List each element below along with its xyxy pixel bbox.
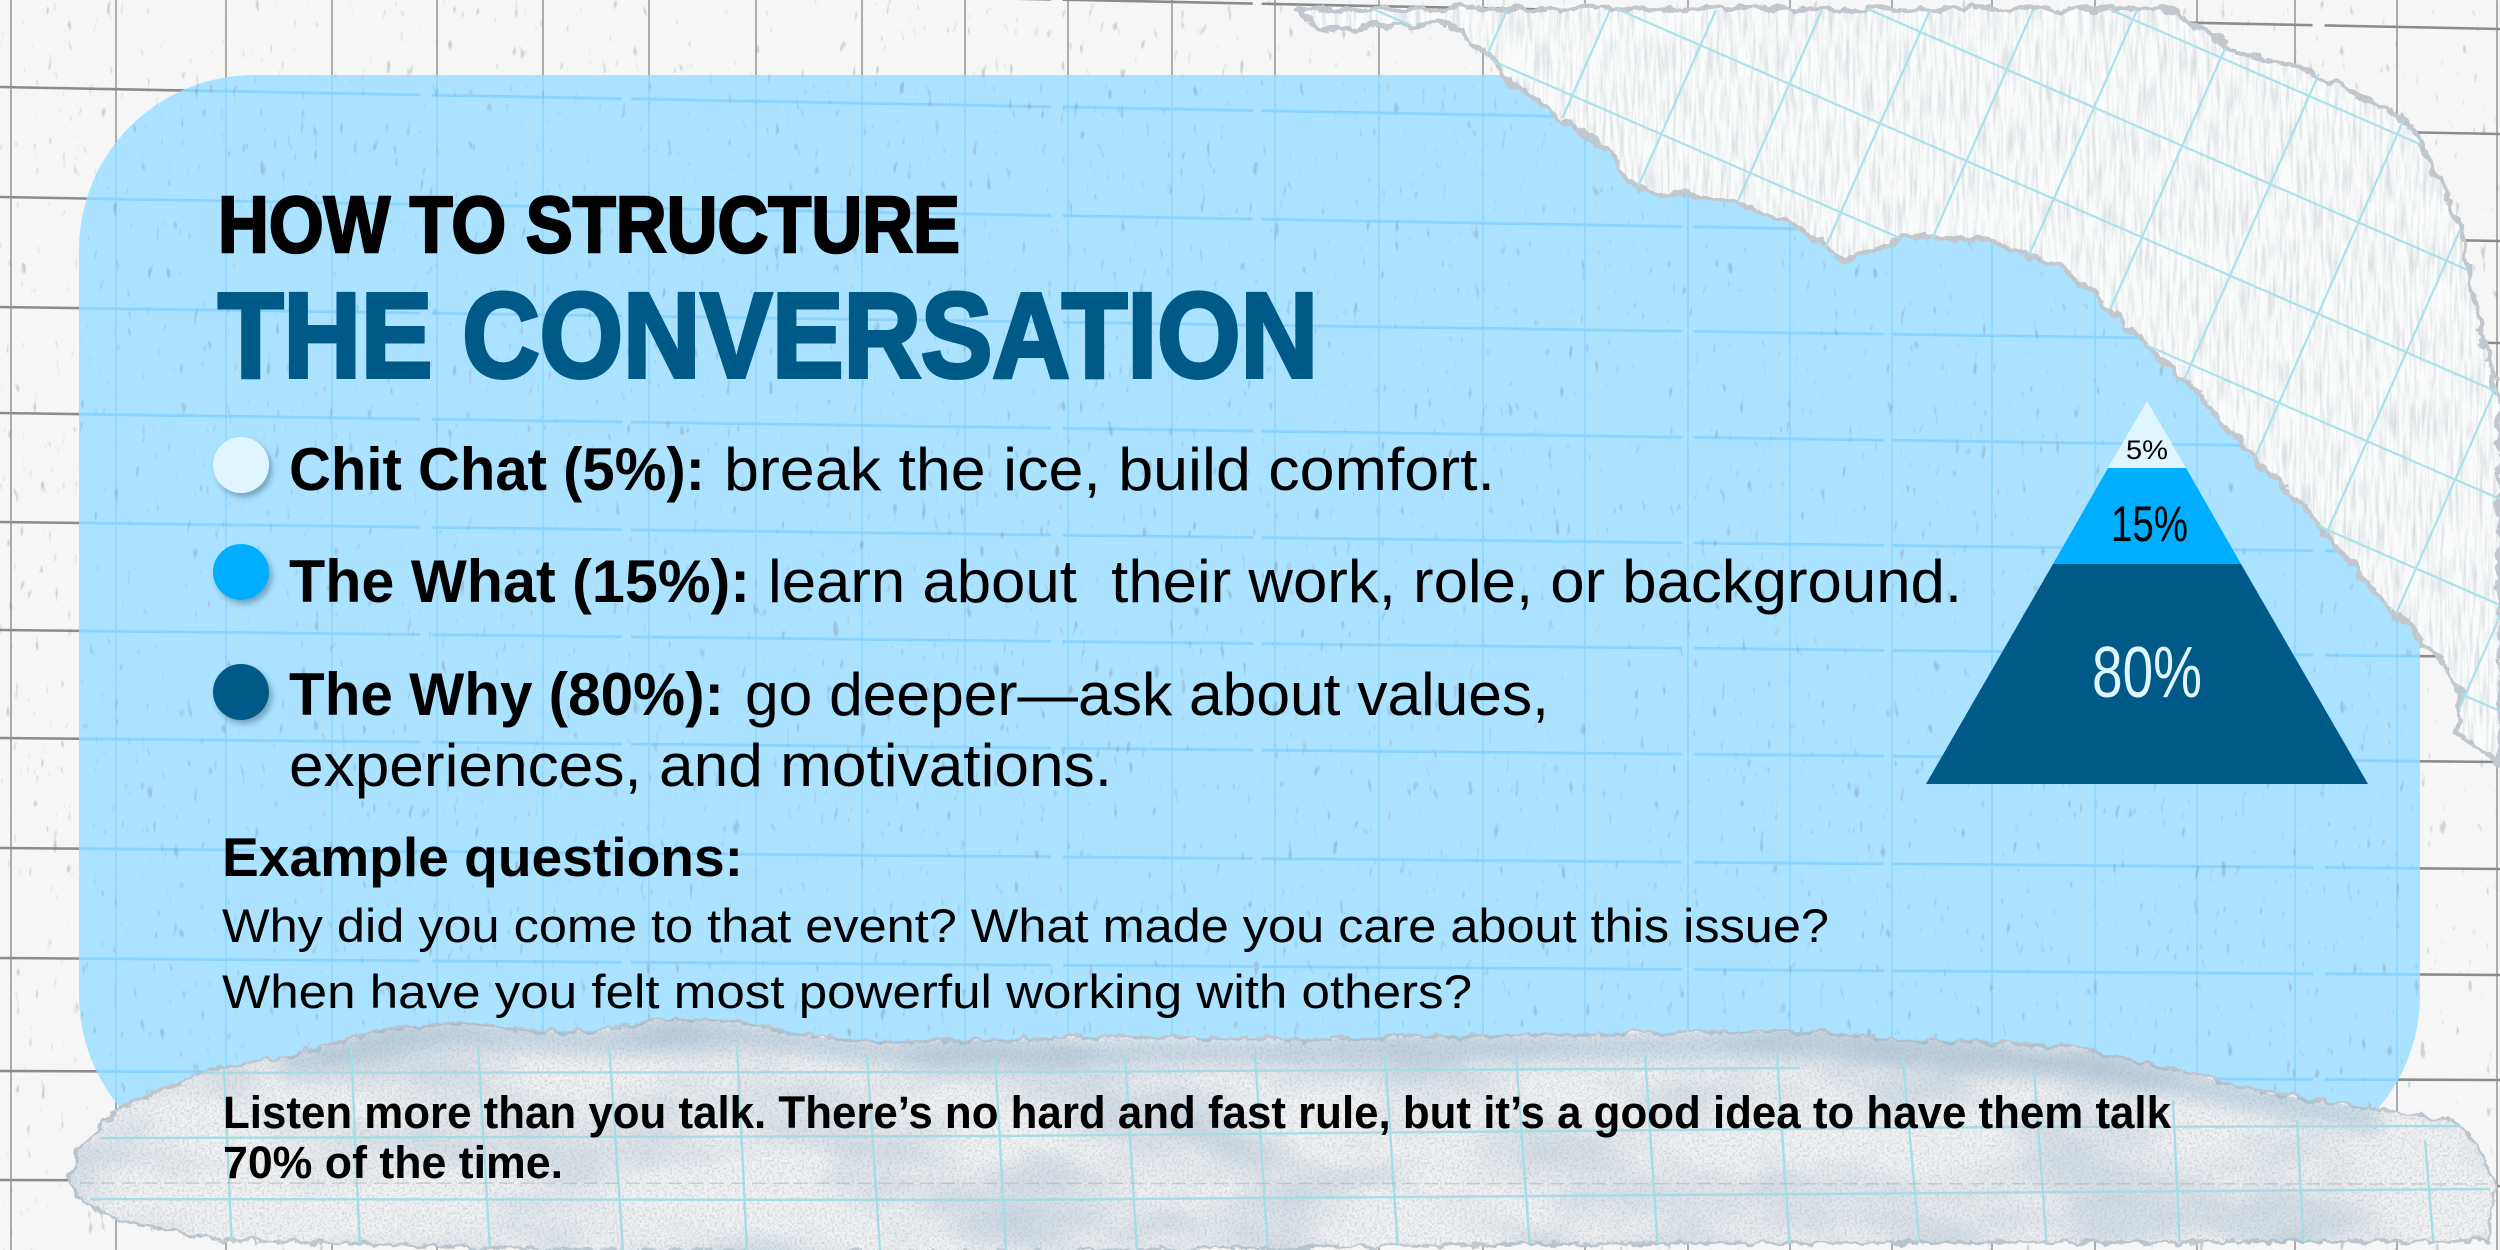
title: [218, 180, 1318, 403]
item: chit chat: [289, 436, 1495, 503]
question line 2: When have you felt most powerful working with others?: [222, 965, 1472, 1018]
heading line 2: THE CONVERSATION: [218, 267, 1318, 403]
panel: blue rounded card: [79, 75, 2420, 1108]
item: the what: The What (15%):: [289, 548, 750, 615]
tier: 15%: [2053, 468, 2241, 564]
item: chit chat: Chit Chat (5%):: [289, 436, 705, 503]
torn paper: bottom strip: [70, 1020, 2495, 1250]
tier: 5%: 5%: [2126, 435, 2168, 465]
torn paper: top right: [1294, 2, 2500, 768]
question line 1: Why did you come to that event? What made you care about this issue?: [222, 899, 1829, 952]
list: conversation stages: [213, 436, 1962, 799]
callout: listen more: [223, 1087, 2172, 1188]
item: the why: experiences, and motivations.: [289, 732, 1112, 799]
icon: light bullet: [213, 437, 269, 493]
pyramid chart: [1926, 401, 2368, 784]
tier: 80%: [1926, 564, 2368, 784]
callout: listen more: Listen more than you talk. There’s no hard and fast rule, but it’s a good idea to have them talk: [223, 1087, 2172, 1138]
example questions: [222, 826, 1829, 1018]
heading line 1: HOW TO STRUCTURE: [218, 180, 960, 269]
callout: listen more: 70% of the time.: [223, 1137, 563, 1188]
icon: mid blue bullet: [213, 544, 269, 600]
item: the why: go deeper—ask about values,: [745, 661, 1549, 728]
tier: 80%: 80%: [2092, 633, 2202, 713]
item: the why: [289, 661, 1549, 799]
item: chit chat: break the ice, build comfort.: [724, 436, 1495, 503]
icon: dark blue bullet: [213, 664, 269, 720]
item: the what: [289, 548, 1962, 615]
item: the why: The Why (80%):: [289, 661, 724, 728]
tier: 15%: 15%: [2111, 496, 2188, 552]
tier: 5%: [2108, 401, 2186, 468]
item: the what: learn about their work, role, or background.: [768, 548, 1962, 615]
example heading: Example questions:: [222, 826, 743, 888]
